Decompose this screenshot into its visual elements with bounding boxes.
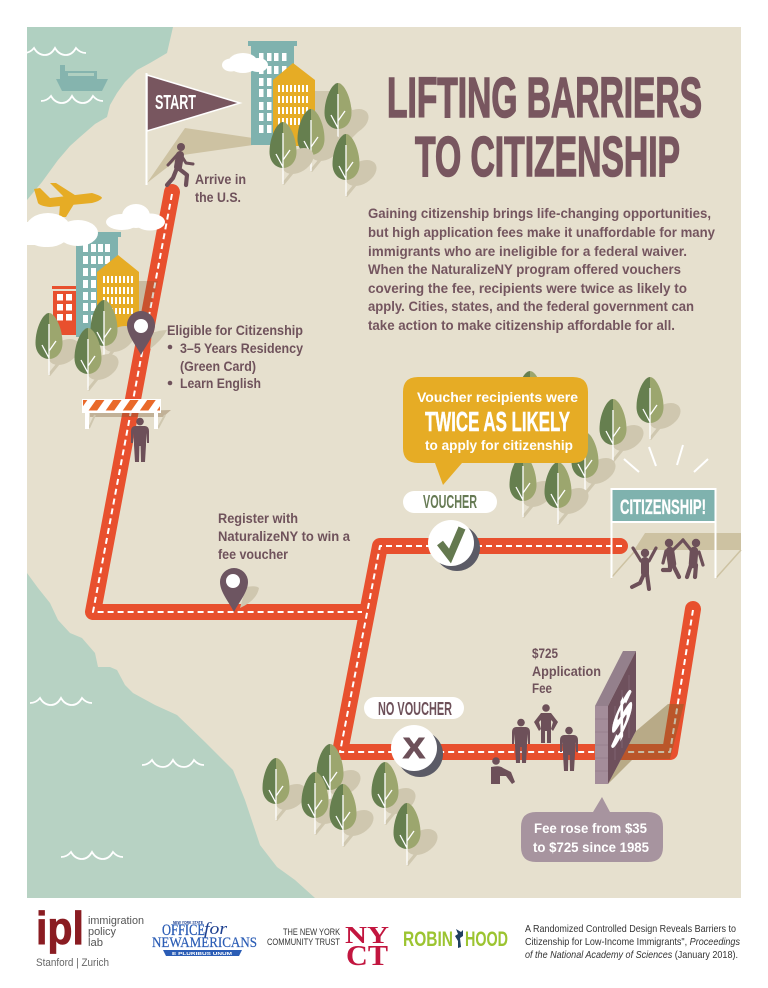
tree [262,758,311,820]
callout: fee rose: to $725 since 1985 [533,839,649,855]
text: intro paragraph: Gaining citizenship brings life-changing opportunities, [368,205,711,221]
icon: location pin, eligible [127,311,167,355]
logo: immigration policy lab: ipl [36,902,84,954]
flag: start [146,73,240,185]
text: register: NaturalizeNY to win a [218,529,350,544]
text: application fee: Fee [532,681,552,696]
tree [510,455,558,517]
icon: brick wall with dollar sign [595,651,636,784]
icon: celebrating people [632,539,703,589]
dollar sign: $ [611,671,632,766]
person sitting [491,757,515,784]
icon: X badge [391,725,443,777]
tree [74,328,123,390]
callout: fee rose [521,797,663,862]
person hands on hips [534,704,558,743]
text: intro paragraph: covering the fee, recipients were twice as likely to [368,280,687,296]
logo: immigration policy lab: policy [88,926,116,938]
wall front [595,706,608,784]
icon: location pin, register [220,568,259,612]
trees: voucher hill [510,371,685,524]
text: intro paragraph: apply. Cities, states, and the federal government can [368,298,694,314]
waves and ship group [24,48,204,859]
icon: check mark badge [428,520,480,571]
barrier [82,399,171,429]
text: citation: of the National Academy of Sciences (January 2018). [525,949,738,961]
text: arrive in the U.S.: the U.S. [195,190,241,205]
label: voucher: VOUCHER [423,492,477,512]
tree [316,744,365,806]
flag shadow [147,128,253,183]
logo: robin hood: HOOD [465,928,508,951]
teal tower windows [259,53,286,133]
tree [544,462,593,524]
text: citation: Citizenship for Low-Income Immigrants", Proceedings [525,936,741,948]
logo: new york community trust: CT [346,941,388,972]
buildings: top city [248,41,360,150]
wave bottom 1 [30,698,92,705]
logo: immigration policy lab: lab [88,937,103,949]
banner shadow [611,533,741,578]
label: voucher [403,491,497,513]
celebration rays [624,445,708,472]
icon: waiting people [491,704,578,784]
logo: new york community trust [267,923,389,972]
text: register: Register with [218,511,298,526]
person high five right [683,539,703,577]
text: intro paragraph: but high application fees make it unaffordable for many [368,224,715,240]
text: intro paragraph: When the NaturalizeNY program offered vouchers [368,261,681,277]
trees: second city [36,300,139,390]
barrier legs [85,410,158,429]
person jumping [632,548,656,589]
ground shadow over road [139,281,158,334]
logo: office for new americans: NEW YORK STATE [173,920,203,925]
logo: office for new americans: for [204,919,227,938]
icon: airplane [34,183,102,217]
tree [324,83,373,145]
text: citation: A Randomized Controlled Design Reveals Barriers to [525,923,736,935]
wall top [595,651,636,706]
road: main route with voucher and no voucher branches [93,192,693,752]
text: application fee [532,646,601,696]
text: register: fee voucher [218,547,289,562]
logo: robin hood [403,928,508,951]
logo: office for new americans [152,919,257,956]
person [560,727,578,771]
logo: immigration policy lab [36,902,144,969]
text: application fee: $725 [532,646,558,661]
wave top 2 [41,96,103,103]
logo: new york community trust: THE NEW YORK [283,927,340,937]
wall shadow [608,704,684,784]
red building [52,286,77,335]
red building windows [57,294,72,320]
tree [302,772,350,834]
tree [372,762,420,824]
yellow tower [97,255,139,335]
tree [332,134,381,196]
icon: ship [56,65,108,91]
text: eligible for citizenship: Eligible for Citizenship [167,323,303,338]
logo: robin hood: ROBIN [403,928,453,951]
person [512,719,530,763]
logo: immigration policy lab: immigration [88,915,144,927]
callout: twice as likely [403,377,588,485]
tree [636,377,685,439]
tree [516,371,565,433]
text: register [218,511,350,562]
cloud left [25,213,98,247]
flag pole [146,73,148,185]
bricks [595,675,629,771]
tree [600,399,648,461]
label: no voucher: NO VOUCHER [378,699,452,719]
text: intro paragraph: take action to make citizenship affordable for all. [368,317,675,333]
clouds near airplane [25,204,165,247]
tree [90,300,139,362]
teal tower [76,232,121,337]
text: eligible for citizenship: 3–5 Years Residency [180,341,303,356]
icon: walking person [167,143,193,185]
text: intro paragraph: immigrants who are ineligible for a federal waiver. [368,243,687,259]
callout: fee rose: Fee rose from $35 [534,820,647,836]
trees: top city [270,83,381,196]
wall side [608,651,636,784]
tree [298,109,346,171]
text: arrive in the U.S. [195,172,246,205]
logo: new york community trust: COMMUNITY TRUST [267,937,340,947]
text: intro paragraph [368,205,715,333]
cloud: top city [222,53,268,73]
trees: lower left [262,744,442,865]
logo: new york community trust: NY [345,923,389,949]
callout: twice as likely: TWICE AS LIKELY [425,406,570,437]
yellow tower windows [278,85,308,125]
icon: archer [455,929,463,948]
text: eligible for citizenship: Learn English [180,376,261,391]
logo: office for new americans: E PLURIBUS UNUM [172,951,232,956]
logo: office for new americans: NEWAMERICANS [152,935,257,951]
title [387,66,702,189]
tree [330,784,378,846]
teal tower [248,41,297,145]
cloud right [106,204,165,230]
icon: person at barrier [131,418,149,462]
sea: top left [27,27,173,200]
ground shadow [315,91,360,150]
tree [572,432,620,494]
tree [270,122,318,184]
teal tower windows [83,244,110,323]
icon: X badge: X [403,733,426,765]
text: arrive in the U.S.: Arrive in [195,172,246,187]
barrier board [82,399,161,413]
text: eligible for citizenship: (Green Card) [180,359,256,374]
callout: twice as likely: to apply for citizenship [425,437,573,453]
text: eligible for citizenship [167,323,303,391]
wave bottom 3 [61,852,123,859]
banner sign: CITIZENSHIP! [620,496,706,519]
barrier shadow [89,410,171,428]
wave bottom 2 [142,760,204,767]
buildings: second city [52,232,158,337]
banner posts [610,488,716,578]
wave top 1 [24,48,86,55]
person high five left [663,539,683,577]
yellow tower [273,63,315,146]
flag label: START [155,92,196,114]
yellow tower windows [103,276,133,314]
citizenship banner [610,488,741,578]
logo: office for new americans: OFFICE [162,922,205,939]
sea: bottom left [27,573,315,898]
label: no voucher [364,697,464,719]
pennant [147,75,240,131]
logo: immigration policy lab: Stanford | Zurich [36,957,109,969]
text: citation [525,923,741,961]
callout: twice as likely: Voucher recipients were [417,389,578,405]
tree [36,313,84,375]
tree [394,803,442,865]
text: application fee: Application [532,664,601,679]
